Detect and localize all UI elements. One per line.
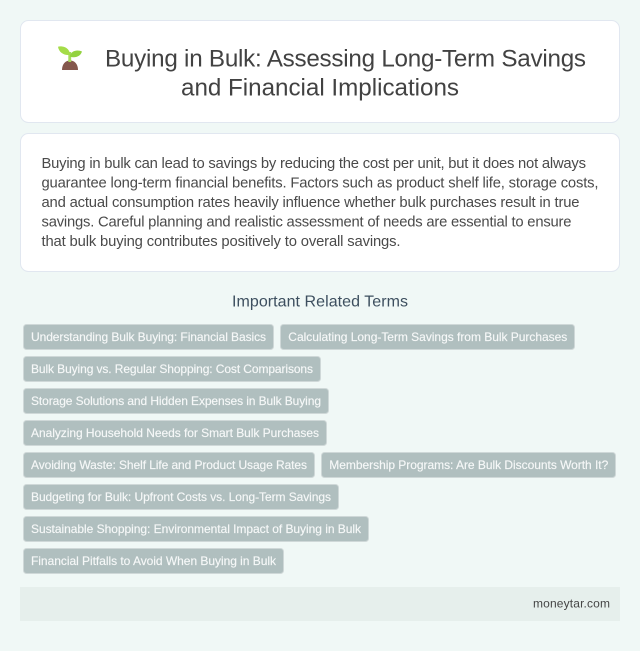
tag: understanding bulk buying [24, 324, 274, 350]
tag: membership programs [322, 452, 616, 478]
summary text: savings. Careful planning and realistic assessment of needs are essential to ensure [42, 214, 572, 230]
tag: avoiding waste [24, 452, 314, 478]
summary text [42, 156, 598, 250]
panel: title card [20, 20, 620, 122]
tag: bulk vs regular [24, 356, 320, 382]
summary text: and actual consumption rates heavily influence whether bulk purchases result in true [42, 195, 580, 211]
tag: storage solutions: Storage Solutions and Hidden Expenses in Bulk Buying [31, 394, 321, 408]
tag: budgeting: Budgeting for Bulk: Upfront Costs vs. Long-Term Savings [31, 490, 331, 504]
tag: financial pitfalls: Financial Pitfalls to Avoid When Buying in Bulk [31, 554, 277, 568]
title: and Financial Implications [181, 74, 459, 102]
tag: sustainable shopping [24, 516, 368, 542]
tag: calculating savings: Calculating Long-Term Savings from Bulk Purchases [288, 330, 567, 344]
tag: sustainable shopping: Sustainable Shopping: Environmental Impact of Buying in Bulk [31, 522, 362, 536]
tag: storage solutions [24, 388, 328, 414]
summary text: guarantee long-term financial benefits. Factors such as product shelf life, storage costs, [42, 176, 598, 192]
tag: financial pitfalls [24, 548, 284, 574]
footer bar: moneytar.com [533, 596, 610, 610]
tag: calculating savings [280, 324, 574, 350]
tag: avoiding waste: Avoiding Waste: Shelf Life and Product Usage Rates [31, 458, 307, 472]
summary text: Buying in bulk can lead to savings by reducing the cost per unit, but it does not always [42, 156, 586, 172]
title [105, 46, 586, 102]
icon: sprout [58, 46, 82, 70]
tag: household needs [24, 420, 326, 446]
tag: household needs: Analyzing Household Needs for Smart Bulk Purchases [31, 426, 319, 440]
heading: important related terms: Important Related Terms [232, 294, 408, 310]
summary text: that bulk buying contributes positively to overall savings. [42, 234, 400, 250]
tag: bulk vs regular: Bulk Buying vs. Regular Shopping: Cost Comparisons [31, 362, 313, 376]
footer bar [20, 587, 620, 621]
tag: membership programs: Membership Programs: Are Bulk Discounts Worth It? [329, 458, 609, 472]
tag list [24, 324, 616, 574]
tag: budgeting [24, 484, 338, 510]
title: Buying in Bulk: Assessing Long-Term Savings [105, 46, 586, 72]
panel: summary card [20, 134, 620, 272]
tag: understanding bulk buying: Understanding Bulk Buying: Financial Basics [31, 330, 266, 344]
